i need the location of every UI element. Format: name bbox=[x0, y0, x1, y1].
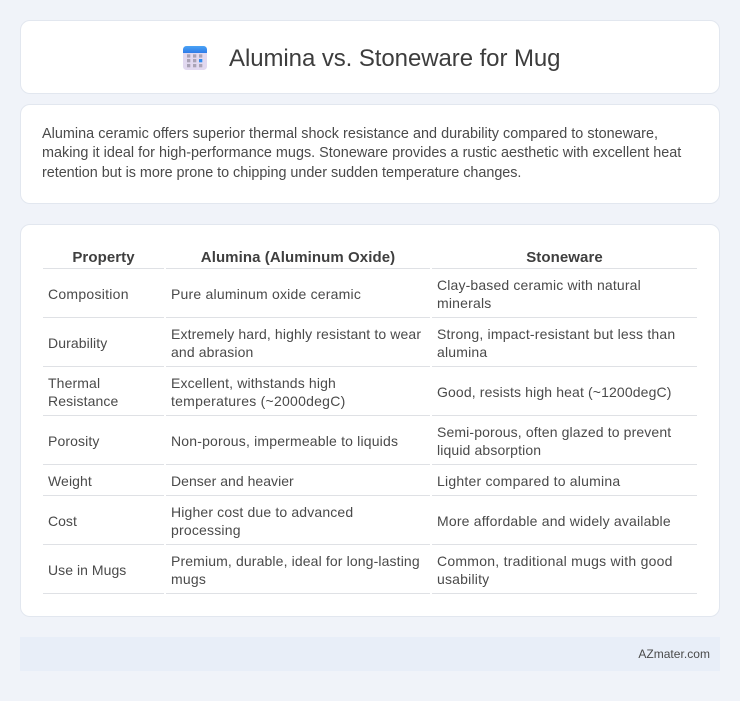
Durability: stoneware bbox=[437, 326, 675, 360]
table header: Property: Property bbox=[72, 249, 135, 266]
Porosity: stoneware bbox=[437, 424, 672, 458]
Thermal Resistance: alumina: Excellent, withstands high bbox=[171, 375, 336, 391]
Durability: stoneware: alumina bbox=[437, 344, 487, 360]
header card bbox=[20, 20, 720, 94]
icon: calendar bbox=[183, 46, 207, 70]
table header: Stoneware: Stoneware bbox=[526, 249, 603, 266]
row: Durability: Durability bbox=[48, 335, 107, 351]
Composition: stoneware: minerals bbox=[437, 295, 492, 311]
Thermal Resistance: stoneware: Good, resists high heat (~1200degC) bbox=[437, 384, 672, 400]
intro paragraph: retention but is more prone to chipping under sudden temperature changes. bbox=[42, 165, 521, 181]
Porosity: stoneware: Semi-porous, often glazed to prevent bbox=[437, 424, 671, 440]
Durability: alumina bbox=[171, 326, 421, 360]
Porosity: alumina: Non-porous, impermeable to liquids bbox=[171, 433, 398, 449]
Composition: stoneware bbox=[437, 277, 641, 311]
Use in Mugs: stoneware: Common, traditional mugs with good bbox=[437, 553, 673, 569]
row: Thermal Resistance bbox=[48, 375, 118, 409]
row: Thermal Resistance: Thermal bbox=[48, 375, 100, 391]
row: Porosity: Porosity bbox=[48, 433, 100, 449]
Use in Mugs: stoneware bbox=[437, 553, 673, 587]
row: Cost: Cost bbox=[48, 513, 77, 529]
Thermal Resistance: alumina: temperatures (~2000degC) bbox=[171, 393, 346, 409]
Durability: alumina: Extremely hard, highly resistant to wear bbox=[171, 326, 421, 342]
Composition: alumina: Pure aluminum oxide ceramic bbox=[171, 286, 361, 302]
footer bar bbox=[20, 637, 720, 671]
Thermal Resistance: alumina bbox=[171, 375, 346, 409]
footer source text: AZmater.com bbox=[638, 647, 710, 661]
Cost: alumina: processing bbox=[171, 522, 241, 538]
row: Composition: Composition bbox=[48, 286, 129, 302]
Use in Mugs: alumina: mugs bbox=[171, 571, 206, 587]
Cost: alumina: Higher cost due to advanced bbox=[171, 504, 353, 520]
Durability: stoneware: Strong, impact-resistant but less than bbox=[437, 326, 675, 342]
row: Thermal Resistance: Resistance bbox=[48, 393, 118, 409]
table header: Alumina: Alumina (Aluminum Oxide) bbox=[201, 249, 395, 266]
title: Alumina vs. Stoneware for Mug bbox=[229, 45, 560, 72]
Weight: alumina: Denser and heavier bbox=[171, 473, 294, 489]
intro paragraph: making it ideal for high-performance mugs. Stoneware provides a rustic aesthetic with excellent heat bbox=[42, 145, 681, 161]
Durability: alumina: and abrasion bbox=[171, 344, 253, 360]
Cost: stoneware: More affordable and widely available bbox=[437, 513, 671, 529]
Use in Mugs: stoneware: usability bbox=[437, 571, 489, 587]
Cost: alumina bbox=[171, 504, 353, 538]
intro paragraph bbox=[42, 126, 682, 181]
panel: comparison table bbox=[20, 224, 720, 617]
Use in Mugs: alumina bbox=[171, 553, 420, 587]
intro paragraph: Alumina ceramic offers superior thermal shock resistance and durability compared to stoneware, bbox=[42, 126, 658, 142]
row: Weight: Weight bbox=[48, 473, 92, 489]
Porosity: stoneware: liquid absorption bbox=[437, 442, 541, 458]
intro text panel bbox=[20, 104, 720, 204]
Weight: stoneware: Lighter compared to alumina bbox=[437, 473, 620, 489]
Composition: stoneware: Clay-based ceramic with natural bbox=[437, 277, 641, 293]
Use in Mugs: alumina: Premium, durable, ideal for long-lasting bbox=[171, 553, 420, 569]
row: Use in Mugs: Use in Mugs bbox=[48, 562, 126, 578]
